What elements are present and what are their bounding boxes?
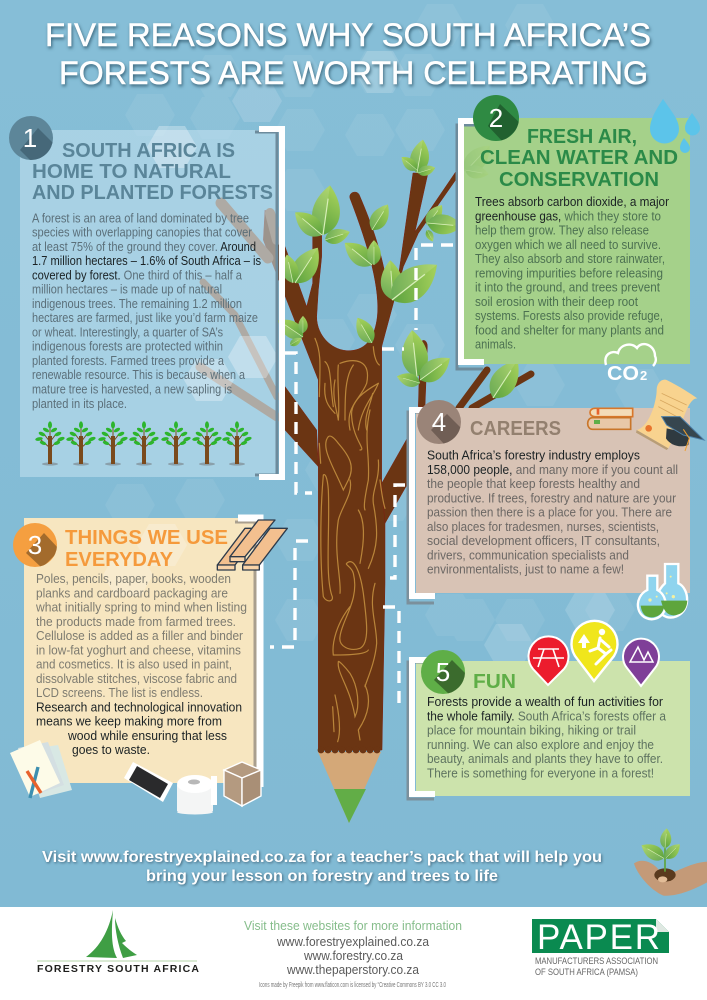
bracket: [408, 660, 435, 799]
heading: [65, 526, 228, 571]
faint hexagons: [103, 524, 187, 596]
icon: picnic pin: [528, 636, 568, 685]
body text: social development officers, IT consultants,: [427, 534, 660, 548]
panel background: [416, 408, 690, 593]
website links: Visit these websites for more information: [244, 918, 462, 933]
heading: CLEAN WATER AND: [480, 146, 678, 169]
tree with pencil trunk: [263, 138, 531, 823]
body text: wood while ensuring that less: [67, 729, 227, 743]
panel background: [24, 518, 256, 783]
website links: www.forestry.co.za: [303, 948, 404, 963]
number badge 3: 3: [28, 530, 42, 560]
icon: graduation cap: [662, 417, 704, 451]
trunk and branches: [263, 170, 457, 750]
body text: Research and technological innovation: [36, 700, 242, 714]
body text: [427, 448, 678, 577]
body text: soil erosion with their deep root: [475, 295, 638, 309]
heading: CAREERS: [470, 417, 561, 440]
logo: Forestry South Africa: [37, 910, 199, 975]
website links: Icons made by Freepik from www.flaticon.com is licensed by “Creative Commons BY 3.0 CC 3.0: [259, 982, 446, 989]
body text: beauty, animals and plants they have to offer.: [427, 752, 663, 766]
body text: and cosmetics. It is also used in paint,: [36, 658, 232, 672]
body text: the products made from farmed trees.: [36, 615, 236, 629]
icon: wooden planks: [217, 520, 287, 570]
icon: smartphone: [124, 762, 173, 802]
icon: paper and pencils: [10, 740, 72, 798]
body text: the whole family. South Africa’s forests offer a: [427, 709, 666, 723]
heading: HOME TO NATURAL: [32, 160, 231, 183]
number badge 2: 2: [489, 103, 503, 133]
body text: indigenous forests are protected within: [32, 340, 223, 354]
heading: [32, 139, 273, 204]
icon: books: [588, 408, 633, 429]
body text: million hectares – is made up of natural: [32, 283, 222, 297]
icon: CO2 cloud: [605, 344, 656, 385]
logo: Forestry South Africa: FORESTRY SOUTH AFRICA: [37, 963, 199, 975]
body text: productive. If trees, forestry and nature are your: [427, 491, 676, 505]
body text: systems. Forests also provide refuge,: [475, 309, 663, 323]
body text: in low-fat yoghurt and cheese, vitamins: [36, 643, 241, 657]
panel 4: careers: [408, 380, 704, 619]
body text: renewable resource. This is because when a: [32, 368, 245, 382]
body text: Poles, pencils, paper, books, wooden: [36, 572, 231, 586]
body text: covered by forest. One third of this – half a: [32, 268, 242, 282]
icon: cardboard box: [224, 762, 261, 806]
bracket: [255, 129, 282, 477]
icon: hand holding seedling: [634, 828, 707, 896]
logo: PAPER manufacturers association: OF SOUTH AFRICA (PAMSA): [535, 967, 638, 978]
panel background: [416, 661, 690, 796]
bracket: [235, 518, 260, 787]
body text: [35, 572, 247, 757]
number badge 4: 4: [432, 407, 446, 437]
call to action: Visit www.forestryexplained.co.za for a teacher’s pack that will help you: [42, 849, 602, 866]
body text: LCD screens. The list is endless.: [36, 686, 203, 700]
body text: [427, 695, 666, 780]
logo: PAPER manufacturers association: [532, 918, 669, 978]
title: [45, 17, 651, 91]
panel background: [20, 130, 278, 477]
footer band: [0, 907, 707, 1000]
body text: indigenous trees. The remaining 1.2 million: [32, 297, 242, 311]
pencil tip: [318, 752, 381, 823]
faint leaves through panel: [458, 139, 497, 181]
body text: Cellulose is added as a filler and binder: [36, 629, 243, 643]
body text: dissolvable stitches, viscose fabric and: [36, 672, 237, 686]
body text: food and shelter for many plants and: [475, 323, 664, 337]
heading: SOUTH AFRICA IS: [62, 139, 235, 162]
body text: planted forests. Farmed trees provide a: [32, 354, 224, 368]
bracket: [457, 121, 484, 369]
body text: [475, 195, 669, 352]
body text: oxygen which we all need to survive.: [475, 238, 661, 252]
website links: www.forestryexplained.co.za: [276, 934, 430, 949]
small upper right branches: [459, 370, 531, 408]
logo: PAPER manufacturers association: MANUFACTURERS ASSOCIATION: [535, 956, 658, 967]
body text: [32, 211, 261, 411]
heading: THINGS WE USE: [65, 526, 228, 549]
website links: www.thepaperstory.co.za: [286, 962, 420, 977]
body text: hectares are farmed, just like you’d farm maize: [32, 311, 258, 325]
body text: place for mountain biking, hiking or trail: [427, 724, 636, 738]
body text: means we keep making more from: [36, 715, 222, 729]
number badge 5: 5: [436, 657, 450, 687]
body text: also places for tradesmen, nurses, scientists,: [427, 520, 659, 534]
icon: trail running pin: [572, 621, 618, 681]
wood grain lines: [315, 338, 385, 742]
scalloped pencil edge: [318, 747, 380, 753]
call to action: [42, 849, 602, 885]
body text: South Africa’s forestry industry employs: [427, 448, 640, 462]
heading: FUN: [473, 670, 516, 693]
heading: [480, 125, 678, 191]
body text: the people that keep forests healthy and: [427, 477, 640, 491]
connector dashes: [270, 245, 453, 703]
panel 2: fresh air, clean water and conservation: [457, 95, 700, 385]
footer background: [0, 907, 707, 1000]
body text: or wheat. Interestingly, a quarter of SA’s: [32, 325, 223, 339]
number badge 4: [417, 400, 461, 444]
body text: goes to waste.: [72, 743, 150, 757]
bracket: [408, 410, 435, 603]
body text: running. We can also explore and enjoy the: [427, 738, 654, 752]
icon: CO2 cloud: CO: [607, 363, 639, 385]
body text: removing impurities before releasing: [475, 266, 663, 280]
panel 1: natural and planted forests: [9, 116, 282, 477]
body text: it into the ground, and trees prevent: [475, 281, 660, 295]
body text: Forests provide a wealth of fun activities for: [427, 695, 663, 709]
body text: help them grow. They also release: [475, 224, 649, 238]
body text: environmentalists, just to name a few!: [427, 563, 624, 577]
body text: animals.: [475, 338, 516, 352]
icon: flasks: [638, 564, 687, 619]
number badge 3: [13, 523, 60, 568]
body text: planted in its place.: [32, 397, 127, 411]
number badge 5: [421, 650, 465, 694]
number badge 1: 1: [23, 123, 37, 153]
title: FORESTS ARE WORTH CELEBRATING: [59, 55, 648, 91]
icon: toilet roll: [177, 775, 217, 814]
body text: at least 75% of the ground they cover. Around: [32, 240, 256, 254]
icon: mountain pin: [623, 639, 659, 686]
body text: passion then there is a place for you. There are: [427, 506, 672, 520]
icon: CO2 cloud: 2: [640, 368, 647, 383]
title: FIVE REASONS WHY SOUTH AFRICA’S: [45, 17, 651, 53]
body text: They also absorb and store rainwater,: [475, 252, 665, 266]
heading: CONSERVATION: [499, 168, 659, 191]
body text: planks and cardboard packaging are: [36, 586, 228, 600]
call to action: bring your lesson on forestry and trees to life: [146, 868, 498, 885]
icon: diploma scroll: [636, 380, 697, 450]
number badge 2: [473, 95, 522, 142]
body text: 1.7 million hectares – 1.6% of South Africa – is: [32, 254, 261, 268]
leaves: [274, 138, 528, 405]
number badge 1: [9, 116, 53, 160]
logo: PAPER manufacturers association: PAPER: [537, 918, 660, 957]
panel background: [464, 118, 690, 364]
panel 3: things we use everyday: [10, 518, 287, 814]
body text: 158,000 people, and many more if you count all: [427, 463, 678, 477]
body text: greenhouse gas, which they store to: [475, 209, 661, 223]
body text: mature tree is harvested, a new sapling is: [32, 382, 232, 396]
body text: Trees absorb carbon dioxide, a major: [475, 195, 669, 209]
heading: AND PLANTED FORESTS: [32, 181, 273, 204]
icon: water drops: [650, 99, 700, 153]
website links: [244, 918, 462, 989]
body text: drivers, communication specialists and: [427, 548, 629, 562]
heading: EVERYDAY: [65, 548, 173, 571]
heading: FRESH AIR,: [527, 125, 637, 148]
body text: A forest is an area of land dominated by tree: [32, 211, 249, 225]
body text: species with overlapping canopies that cover: [32, 226, 252, 240]
panel 5: fun: [408, 621, 690, 799]
body text: There is something for everyone in a forest!: [427, 766, 654, 780]
row of seven saplings: [35, 421, 252, 466]
highlighted hexagons: [147, 126, 278, 401]
faded branches behind panel: [200, 203, 277, 417]
body text: what initially spring to mind when listing: [35, 600, 247, 614]
